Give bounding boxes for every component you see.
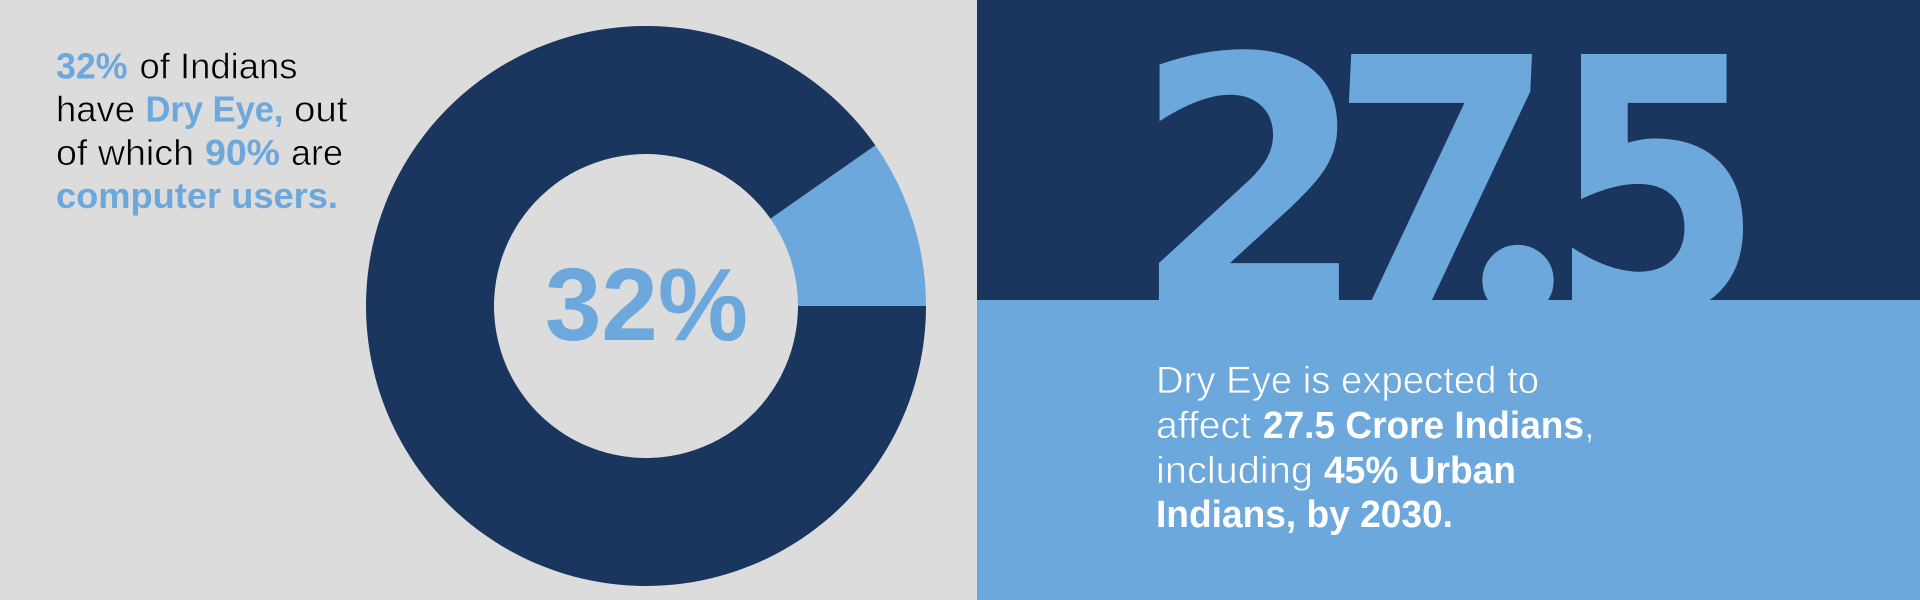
text block: Dry Eye expected to affect 27.5 Crore Indians bbox=[1156, 360, 1595, 536]
text block: 32% of Indians have Dry Eye: out bbox=[294, 89, 348, 130]
panel: bottom right light block bbox=[977, 300, 1920, 600]
text block: Dry Eye expected to affect 27.5 Crore Indians: 27.5 Crore Indians bbox=[1263, 405, 1584, 447]
text block: 32% of Indians have Dry Eye: 90% bbox=[205, 132, 280, 173]
text block: Dry Eye expected to affect 27.5 Crore Indians: 45% Urban bbox=[1324, 450, 1516, 492]
text block: Dry Eye expected to affect 27.5 Crore Indians: Dry Eye is expected to bbox=[1156, 360, 1539, 402]
big number 27.5 bbox=[1158, 49, 1743, 300]
text block: 32% of Indians have Dry Eye: are bbox=[291, 132, 343, 173]
text block: 32% of Indians have Dry Eye: 32% bbox=[56, 46, 128, 86]
donut segment: computer users bbox=[770, 145, 926, 306]
text block: 32% of Indians have Dry Eye: Dry Eye, bbox=[146, 89, 284, 130]
donut chart bbox=[366, 26, 926, 586]
text block: Dry Eye expected to affect 27.5 Crore Indians: including bbox=[1156, 450, 1313, 492]
text block: 32% of Indians have Dry Eye: have bbox=[56, 89, 135, 130]
text block: 32% of Indians have Dry Eye: computer users. bbox=[56, 175, 338, 216]
donut center value: 32% bbox=[545, 247, 748, 362]
text block: Dry Eye expected to affect 27.5 Crore Indians: affect bbox=[1156, 405, 1251, 447]
text block: 32% of Indians have Dry Eye: of which bbox=[56, 132, 194, 173]
text block: 32% of Indians have Dry Eye bbox=[56, 46, 348, 216]
donut segment: remaining share bbox=[366, 26, 926, 586]
text block: Dry Eye expected to affect 27.5 Crore Indians: Indians, by 2030. bbox=[1156, 494, 1453, 536]
text block: Dry Eye expected to affect 27.5 Crore Indians: , bbox=[1584, 405, 1595, 447]
text block: 32% of Indians have Dry Eye: of Indians bbox=[140, 46, 298, 86]
panel: left grey background bbox=[0, 0, 977, 600]
panel: top right dark block with big number bbox=[977, 0, 1920, 300]
